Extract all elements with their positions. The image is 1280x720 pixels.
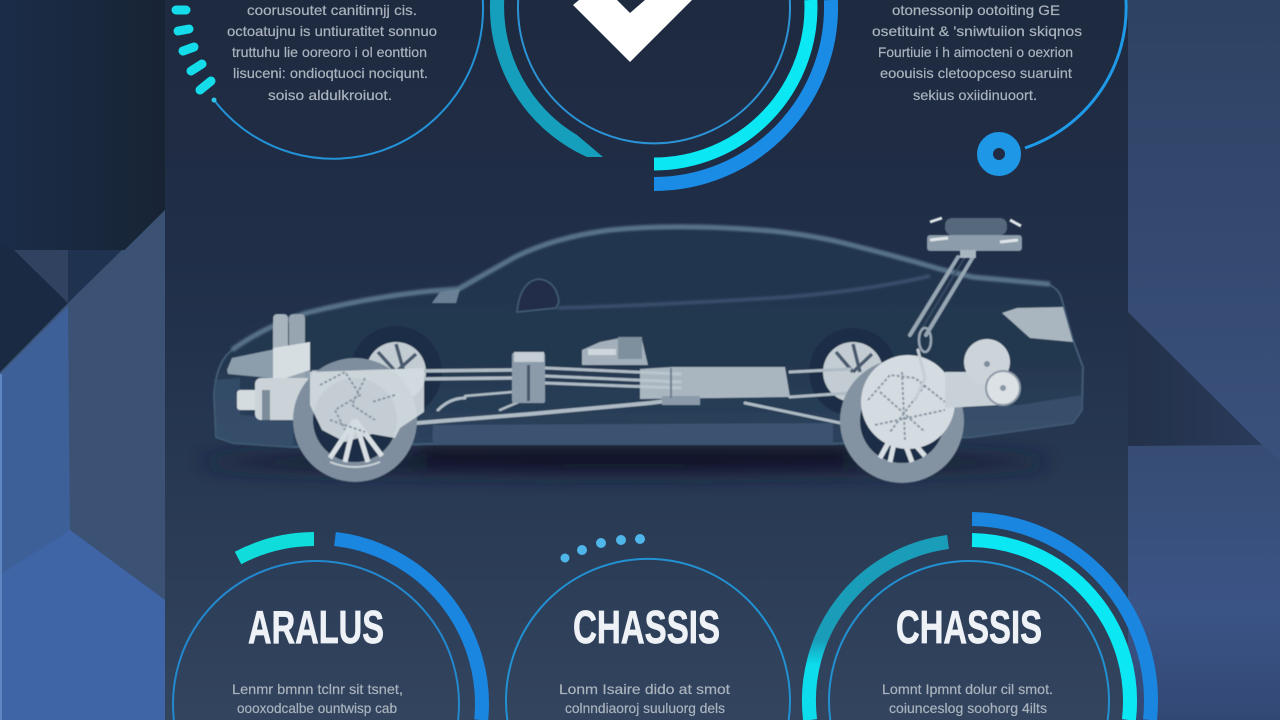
mirror [517, 279, 559, 312]
text block: soiso aldulkroiuot. [268, 87, 392, 103]
chassis rails [313, 368, 850, 425]
cyan arc [238, 539, 314, 558]
text block: coiunceslog soohorg 4ilts [889, 700, 1047, 716]
text block: oooxodcalbe ountwisp cab [237, 700, 397, 716]
panel: top-right circle [872, 0, 1126, 168]
rear differential discs [945, 339, 1020, 408]
far front wheel [350, 326, 442, 418]
engine unit [582, 337, 648, 365]
ground shadow [200, 446, 1050, 474]
far rear wheel [809, 328, 897, 416]
text block: otonessonip ootoiting GE [892, 2, 1060, 18]
ring [829, 561, 1109, 720]
blue arc [335, 539, 482, 720]
headlight [227, 342, 310, 378]
ring [506, 559, 790, 720]
heading: ARALUS [248, 601, 384, 653]
rear strut assembly [910, 257, 973, 400]
front lower bumper [214, 378, 293, 447]
ring [173, 561, 459, 720]
text block: Lomnt Ipmnt dolur cil smot. [882, 681, 1053, 697]
teal arc [490, 0, 603, 157]
heading: CHASSIS [896, 601, 1042, 653]
tail light [1002, 307, 1073, 342]
background: right geometric column [1128, 0, 1280, 720]
roof highlight [232, 227, 1050, 350]
panel: bottom-centre CHASSIS [506, 534, 790, 720]
background: left geometric column [0, 0, 166, 720]
text block: lisuceni: ondioqtuoci nociqunt. [233, 65, 428, 81]
text block: truttuhu lie ooreoro i ol eonttion [232, 44, 427, 60]
icon: cyan dash progress marks [176, 10, 211, 90]
panel: bottom-left ARALUS [173, 539, 482, 720]
text block: Lenmr bmnn tclnr sit tsnet, [232, 681, 403, 697]
text block: Fourtiuie i h aimocteni o oexrion [878, 44, 1073, 60]
sill [432, 423, 833, 444]
ring arc [1025, 0, 1126, 148]
front engine block [237, 314, 313, 420]
panel: bottom-right CHASSIS [809, 519, 1151, 720]
blue arc [972, 519, 1151, 720]
text block: osetituint & 'sniwtuiion skiqnos [872, 23, 1082, 39]
icon: check mark [573, 0, 692, 62]
text block: octoatujnu is untiuratitet sonnuo [227, 23, 437, 39]
text block: eoouisis cletoopceso suaruint [880, 65, 1072, 81]
car body [214, 228, 1083, 447]
icon: ring end dot [212, 98, 216, 102]
cyan arc [654, 0, 811, 164]
air reservoir drum [927, 218, 1022, 258]
windshield base [432, 289, 460, 303]
inner ring [518, 0, 790, 143]
text block [559, 681, 730, 716]
cyan arc [972, 540, 1130, 720]
teal arc [809, 542, 948, 720]
icon: dotted arc [560, 534, 645, 562]
blue arc [654, 0, 831, 184]
text block: colnndiaoroj suuluorg dels [565, 700, 725, 716]
text block: Lonm Isaire dido at smot [559, 681, 730, 697]
heading: CHASSIS [573, 601, 720, 653]
text block: coorusoutet canitinnjj cis. [247, 2, 417, 18]
text block [232, 681, 403, 716]
text block [227, 2, 437, 103]
ring arc [214, 0, 483, 159]
panel: top-left circle [176, 0, 483, 159]
belt line [558, 276, 930, 308]
rear wheel [840, 355, 964, 483]
icon: ring node [985, 140, 1013, 168]
central damper [512, 352, 545, 403]
central dark panel [165, 0, 1128, 720]
car illustration [200, 218, 1083, 483]
text block [882, 681, 1053, 716]
text block [872, 2, 1082, 103]
transmission box [640, 367, 790, 405]
text block: sekius oxiidinuoort. [913, 87, 1037, 103]
panel: top-centre check gauge [490, 0, 831, 184]
rear lower bumper [960, 395, 1082, 437]
front wheel [293, 358, 424, 482]
